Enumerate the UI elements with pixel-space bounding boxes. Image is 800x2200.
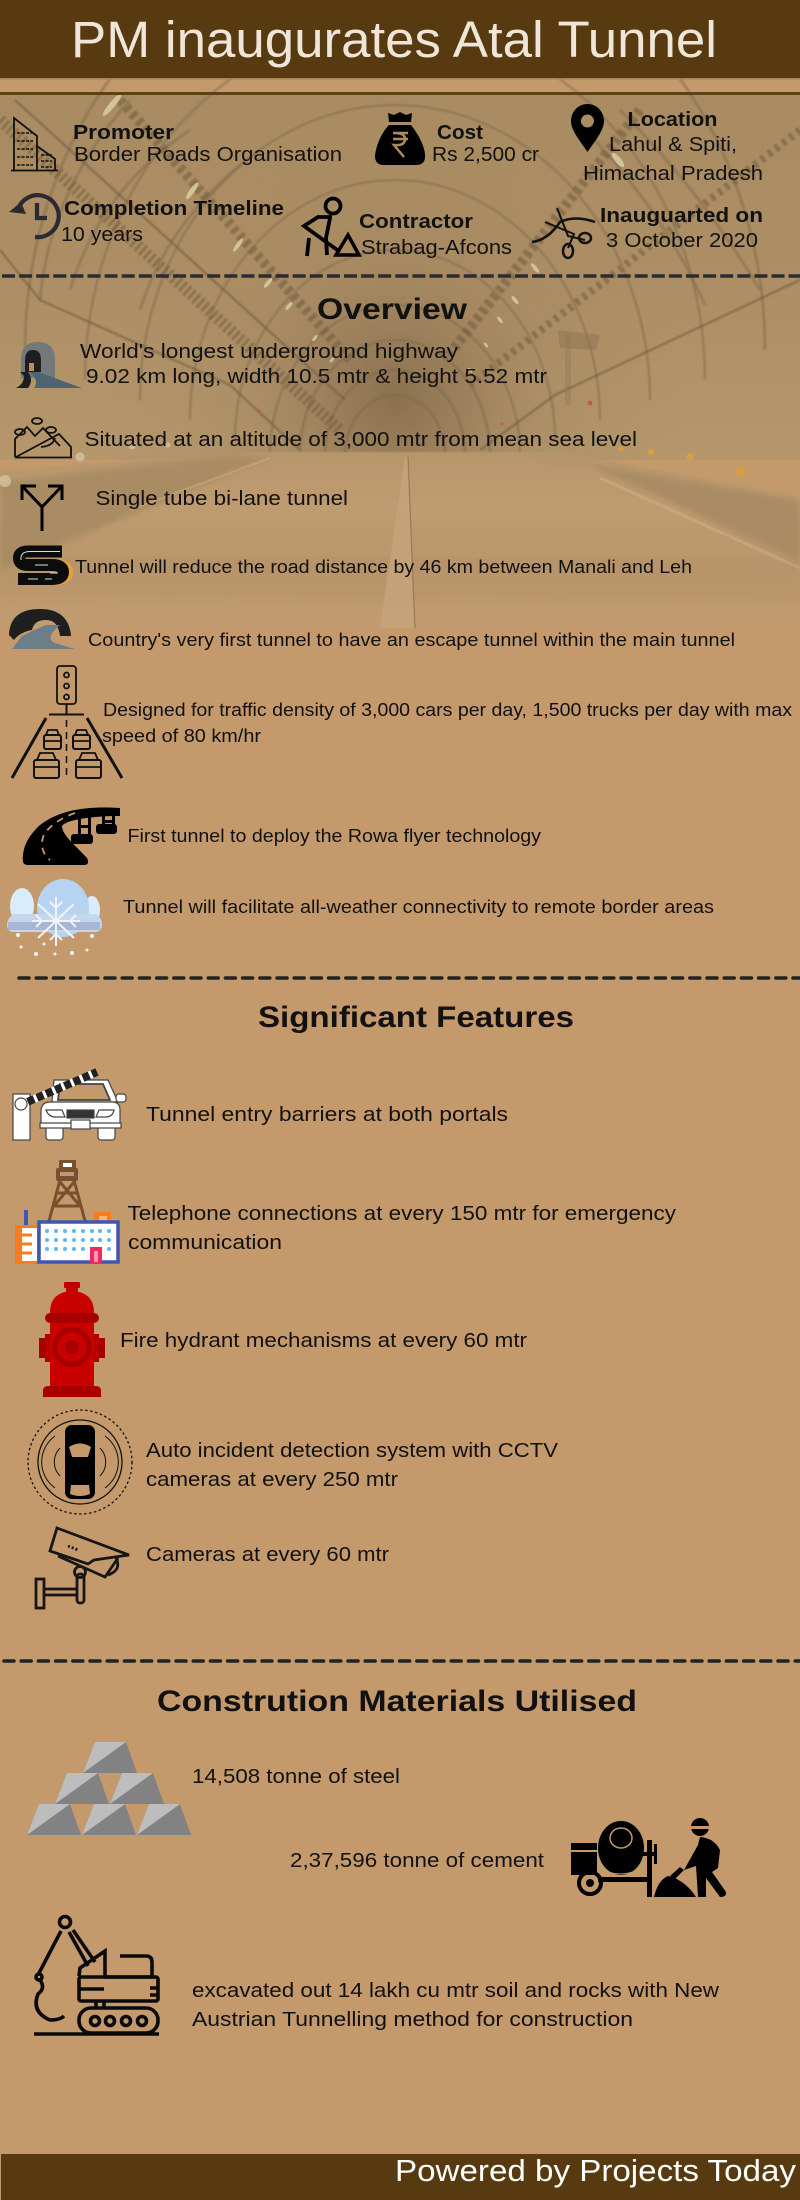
feature text: barriers: Tunnel entry barriers at both portals [146, 1103, 508, 1126]
background photo: tunnel interior [0, 0, 800, 628]
title banner [0, 0, 800, 78]
heading: construction materials: Constrution Materials Utilised [157, 1685, 637, 1718]
icon: flyover road [23, 808, 120, 865]
icon: tunnel portal [16, 342, 82, 388]
location text [583, 108, 763, 185]
icon: winding road [18, 552, 67, 579]
footer text: Powered by Projects Today [395, 2153, 797, 2188]
icon: building [11, 118, 58, 170]
overview text: longest highway [80, 340, 547, 388]
overview text: escape tunnel: Country's very first tunnel to have an escape tunnel within the main tunnel [88, 630, 735, 650]
panel: significant features [13, 1072, 677, 1608]
heading: significant features: Significant Features [258, 1001, 574, 1034]
panel: key facts [9, 104, 763, 259]
icon: fire hydrant [39, 1282, 105, 1397]
icon: traffic road [12, 666, 122, 778]
overview text: distance: Tunnel will reduce the road distance by 46 km between Manali and Leh [75, 557, 692, 577]
inaugurated text [600, 204, 763, 252]
contractor text [359, 210, 512, 259]
feature text: telephone [128, 1202, 677, 1254]
feature text: telephone: communication [128, 1231, 282, 1254]
feature text: incident detection: Auto incident detection system with CCTV [146, 1439, 558, 1462]
promoter text [73, 121, 342, 166]
completion timeline text: Completion Timeline [64, 197, 284, 220]
overview text: traffic density: Designed for traffic density of 3,000 cars per day, 1,500 trucks per day with max [103, 700, 792, 720]
icon: cement mixer and worker [571, 1818, 726, 1897]
material text: cement: 2,37,596 tonne of cement [290, 1849, 544, 1872]
icon: telephone tower and building [15, 1160, 118, 1264]
material text: steel: 14,508 tonne of steel [192, 1765, 400, 1788]
location text: Lahul & Spiti, [609, 133, 737, 156]
inaugurated text: 3 October 2020 [606, 229, 758, 252]
panel: overview list [7, 340, 792, 956]
footer banner [1, 2153, 800, 2200]
band under title [0, 78, 800, 95]
completion timeline text: 10 years [61, 223, 143, 246]
road surface [0, 452, 800, 628]
icon: car with detection rings [28, 1410, 132, 1514]
title: PM inaugurates Atal Tunnel [71, 11, 717, 68]
location text: Himachal Pradesh [583, 162, 763, 185]
inaugurated text: Inauguarted on [600, 204, 763, 227]
completion timeline text [61, 197, 284, 246]
heading: overview: Overview [317, 293, 468, 326]
overview text: rowa flyer: First tunnel to deploy the Rowa flyer technology [128, 826, 541, 846]
feature text: incident detection [146, 1439, 558, 1491]
feature text: hydrants: Fire hydrant mechanisms at every 60 mtr [120, 1329, 527, 1352]
promoter text: Promoter [73, 121, 174, 144]
contractor text: Contractor [359, 210, 473, 233]
location text: Location [628, 108, 718, 131]
icon: worker digging [304, 198, 359, 256]
icon: entry barrier and car [13, 1072, 126, 1140]
panel: construction materials [27, 1742, 726, 2034]
cost text: Rs 2,500 cr [432, 143, 539, 166]
icon: excavator [34, 1916, 159, 2034]
overview text: longest highway: World's longest underground highway [80, 340, 459, 363]
icon: location pin [571, 104, 604, 152]
overview text: longest highway: 9.02 km long, width 10.5 mtr & height 5.52 mtr [86, 365, 547, 388]
icon: escape tunnel [9, 609, 75, 649]
icon: money bag [375, 112, 425, 165]
promoter text: Border Roads Organisation [74, 143, 342, 166]
material text: excavation [192, 1979, 719, 2031]
material text: excavation: Austrian Tunnelling method for construction [192, 2008, 633, 2031]
contractor text: Strabag-Afcons [361, 236, 512, 259]
icon: steel bars [27, 1742, 191, 1835]
feature text: incident detection: cameras at every 250 mtr [146, 1468, 398, 1491]
icon: snow cloud [7, 879, 102, 956]
overview text: altitude: Situated at an altitude of 3,000 mtr from mean sea level [84, 428, 637, 451]
overview text: traffic density: speed of 80 km/hr [102, 726, 261, 746]
icon: fork arrow [22, 486, 62, 531]
overview text: all-weather: Tunnel will facilitate all-weather connectivity to remote border areas [123, 897, 714, 917]
icon: cctv camera [36, 1528, 129, 1608]
cost text [432, 121, 539, 166]
icon: clock with back arrow [9, 195, 59, 237]
overview text: single tube: Single tube bi-lane tunnel [96, 487, 348, 510]
feature text: cameras: Cameras at every 60 mtr [146, 1543, 389, 1566]
feature text: telephone: Telephone connections at every 150 mtr for emergency [128, 1202, 677, 1225]
overview text: traffic density [102, 700, 792, 746]
cost text: Cost [437, 121, 483, 144]
icon: scissors and ribbon [532, 208, 595, 258]
icon: mountains [15, 418, 71, 458]
material text: excavation: excavated out 14 lakh cu mtr soil and rocks with New [192, 1979, 719, 2002]
